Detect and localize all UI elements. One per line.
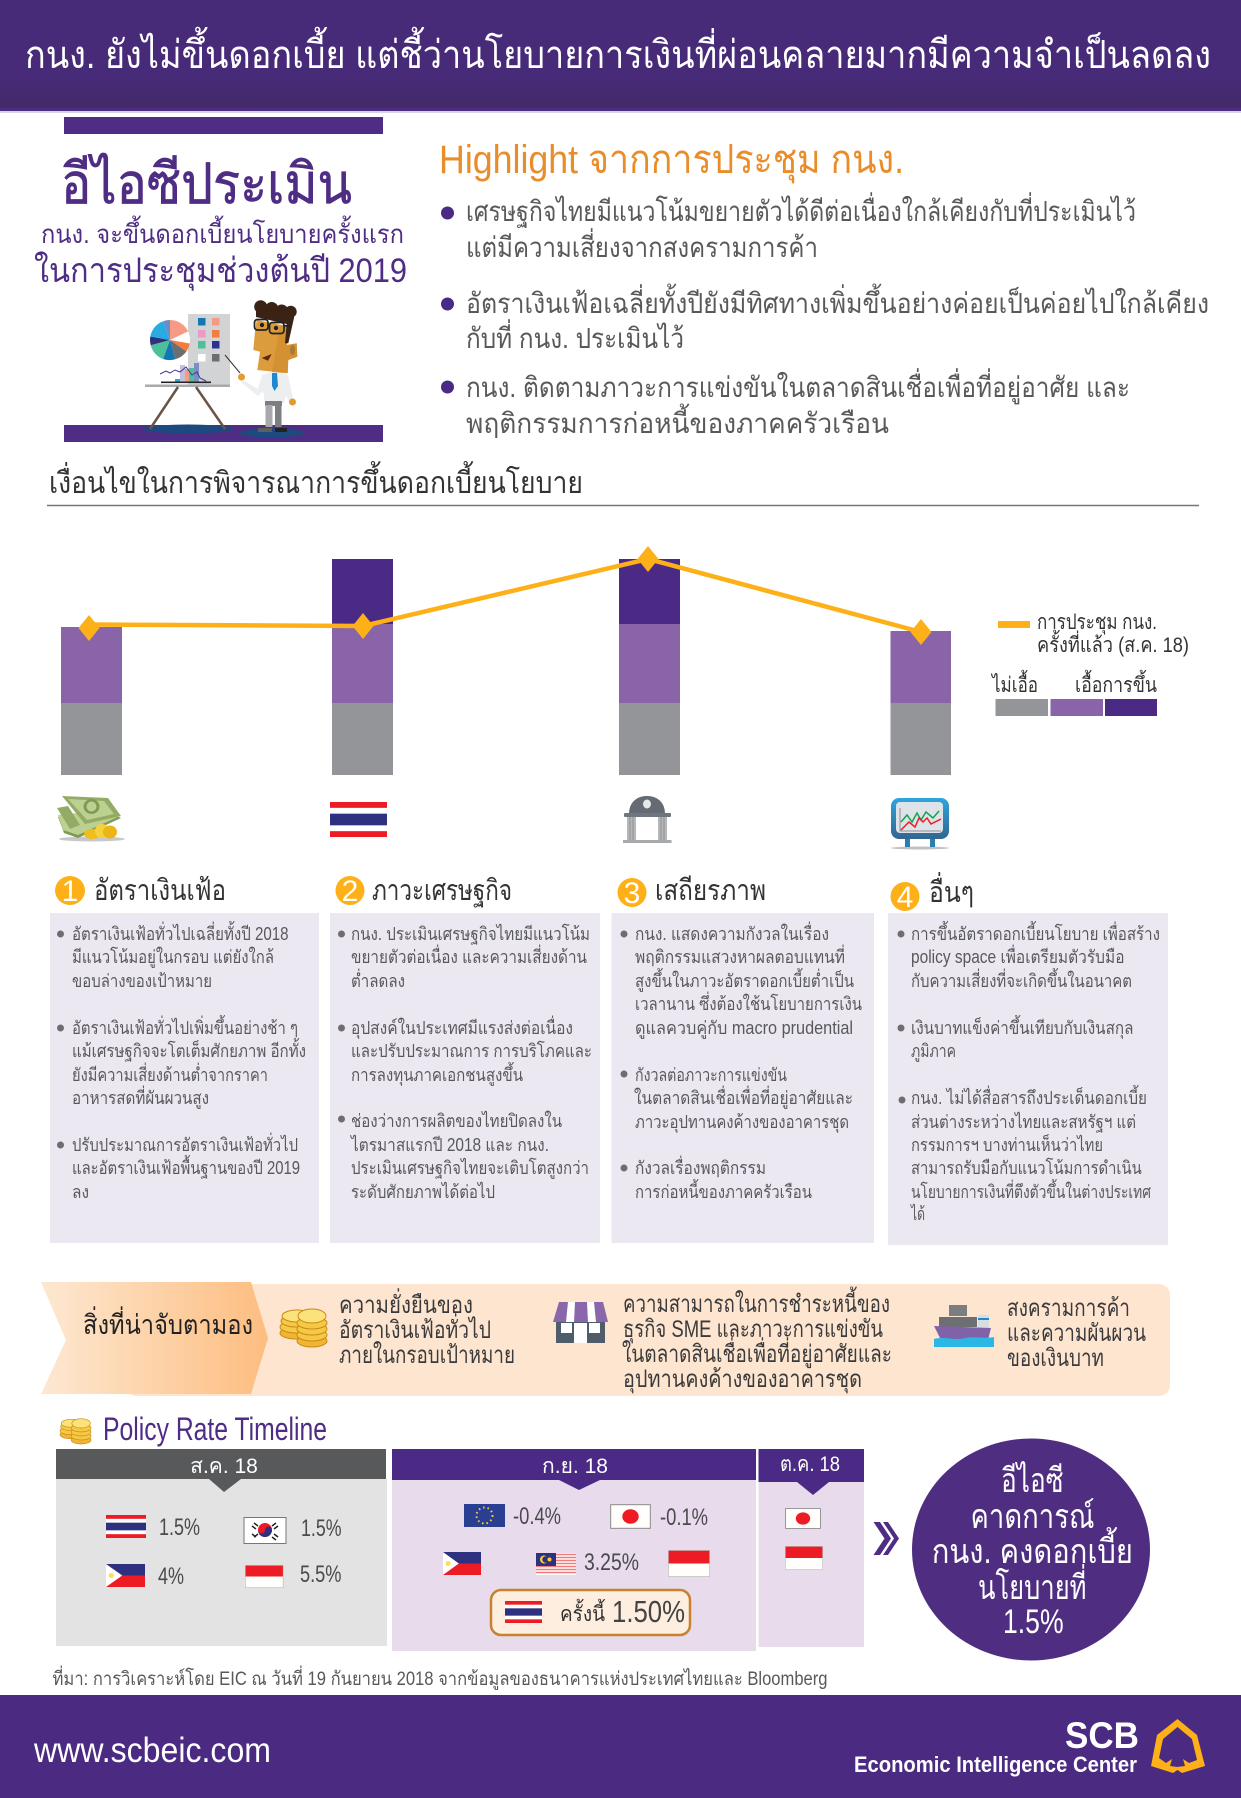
callout: this time 1.50% [491,1590,690,1635]
panel text: มีแนวโน้มอยู่ในกรอบ แต่ยังใกล้ [72,946,274,968]
flag: Korea 1.5%: 1.5% [301,1515,342,1542]
highlight bullet 3: กนง. ติดตามภาวะการแข่งขันในตลาดสินเชื่อเพื่อที่อยู่อาศัย และ [466,368,1130,405]
panel text: ภูมิภาค [911,1041,956,1062]
panel text: ได้ [910,1203,925,1224]
flag: Indonesia 5.5% [245,1561,342,1588]
heading: highlight: Highlight จากการประชุม กนง. [439,138,904,184]
legend: เอื้อการขึ้น [1075,670,1157,697]
callout circle: EIC forecast: 1.5% [1003,1603,1064,1641]
highlight bullet 2: กับที่ กนง. ประเมินไว้ [466,319,684,354]
panel text: การขึ้นอัตราดอกเบี้ยนโยบาย เพื่อสร้าง [911,921,1160,944]
section 2: economy [330,875,600,1243]
panel text: นโยบายการเงินที่ตึงตัวขึ้นในต่างประเทศ [911,1179,1151,1202]
panel: September 2018 [392,1449,756,1651]
panel text: ในตลาดสินเชื่อเพื่อที่อยู่อาศัยและ [634,1085,853,1109]
panel text: เวลานาน ซึ่งต้องใช้นโยบายการเงิน [635,991,862,1014]
watch item 3: สงครามการค้า [1007,1295,1130,1322]
section heading: conditions: เงื่อนไขในการพิจารณาการขึ้นดอกเบี้ยนโยบาย [49,461,583,500]
panel: things to watch [41,1282,1170,1396]
subheading line 2: ในการประชุมช่วงต้นปี 2019 [34,251,407,291]
panel text [330,913,600,1243]
number badge 4: 4 [897,881,913,914]
icon: small coins [60,1419,91,1444]
highlight bullet 3 [441,368,1130,439]
callout circle: EIC forecast: นโยบายที่ [978,1564,1086,1607]
flag: Thailand 1.5%: 1.5% [159,1514,200,1541]
legend [990,611,1189,716]
watch item 2 [622,1286,892,1394]
highlight bullet 3: พฤติกรรมการก่อหนี้ของภาคครัวเรือน [466,403,889,439]
flag: Malaysia 3.25% [536,1549,639,1576]
highlight bullet 1: แต่มีความเสี่ยงจากสงครามการค้า [466,228,818,263]
watch item 2: ในตลาดสินเชื่อเพื่อที่อยู่อาศัยและ [622,1337,892,1369]
flag: Korea 1.5% [244,1515,342,1544]
watch item 1 [339,1288,515,1369]
panel: August 2018: ส.ค. 18 [190,1455,258,1478]
heading: policy rate timeline: Policy Rate Timeline [103,1411,327,1447]
panel text [612,913,874,1243]
watch item 3: และความผันผวน [1007,1320,1146,1347]
panel: September 2018: ก.ย. 18 [542,1455,608,1478]
panel text: สามารถรับมือกับแนวโน้มการดำเนิน [911,1157,1142,1178]
flag: Philippines 4% [106,1563,184,1590]
panel text: กับความเสี่ยงที่จะเกิดขึ้นในอนาคต [911,968,1132,991]
panel: EIC assessment [34,117,407,442]
line: previous meeting [78,546,932,645]
watch item 1: ความยั่งยืนของ [339,1288,473,1319]
number badge 1: 1 [62,875,78,908]
panel text: ดูแลควบคู่กับ macro prudential [635,1018,853,1039]
icon: money [57,796,125,842]
watch item 3 [1007,1295,1146,1372]
bar 2 [332,559,393,775]
panel text: ภาวะอุปทานคงค้างของอาคารชุด [635,1112,849,1133]
number badge 2 [336,875,364,908]
panel text: กรรมการฯ บางท่านเห็นว่าไทย [911,1133,1103,1155]
legend: ไม่เอื้อ [990,670,1038,697]
flag: Thailand 1.5% [106,1514,200,1541]
panel text: กนง. ไม่ได้สื่อสารถึงประเด็นดอกเบี้ย [911,1085,1147,1108]
flag: Philippines 4%: 4% [158,1563,184,1590]
panel text: อุปสงค์ในประเทศมีแรงส่งต่อเนื่อง [351,1015,573,1039]
watch item 2: ความสามารถในการชำระหนี้ของ [623,1286,890,1318]
flag: Indonesia [668,1550,710,1577]
source note: ที่มา: การวิเคราะห์โดย EIC ณ วันที่ 19 กันยายน 2018 จากข้อมูลของธนาคารแห่งประเทศไทยและ Bloomberg [52,1665,828,1690]
flag: EU -0.4%: -0.4% [513,1503,561,1530]
panel text: ต่ำลดลง [351,968,405,991]
flag: EU -0.4% [464,1503,561,1530]
footer [0,1695,1241,1798]
panel text: เงินบาทแข็งค่าขึ้นเทียบกับเงินสกุล [911,1015,1134,1039]
panel text: การก่อหนี้ของภาคครัวเรือน [635,1179,812,1202]
callout circle: EIC forecast [912,1438,1150,1660]
panel text: ช่องว่างการผลิตของไทยปิดลงใน [351,1110,562,1131]
number badge 1 [55,875,85,908]
panel text: ยังมีความเสี่ยงด้านต่ำจากราคา [72,1062,268,1085]
section title: ภาวะเศรษฐกิจ [372,875,512,908]
panel text: ลง [72,1182,89,1202]
flag: Indonesia 5.5%: 5.5% [300,1561,342,1588]
panel text: การลงทุนภาคเอกชนสูงขึ้น [351,1062,523,1086]
section 4: others [888,872,1168,1245]
panel text: กังวลต่อภาวะการแข่งขัน [635,1065,787,1085]
highlight bullet 1 [441,192,1136,263]
panel text: ประเมินเศรษฐกิจไทยจะเติบโตสูงกว่า [351,1157,589,1179]
panel: October 2018 [758,1449,864,1647]
flag: Indonesia [785,1546,823,1570]
legend: ครั้งที่แล้ว (ส.ค. 18) [1037,630,1189,657]
panel text: กนง. แสดงความกังวลในเรื่อง [635,921,829,944]
panel: August 2018 [56,1449,387,1646]
watch item 1: ภายในกรอบเป้าหมาย [339,1341,515,1369]
watch item 3: ของเงินบาท [1007,1345,1104,1372]
panel text: และปรับประมาณการ การบริโภคและ [351,1040,592,1061]
arrow: chevrons [874,1522,899,1555]
panel text: กังวลเรื่องพฤติกรรม [635,1155,766,1178]
watch item 1: อัตราเงินเฟ้อทั่วไป [339,1313,491,1344]
icon: cargo ship [934,1305,994,1347]
panel text: กนง. ประเมินเศรษฐกิจไทยมีแนวโน้ม [351,923,590,945]
subheading line 1: กนง. จะขึ้นดอกเบี้ยนโยบายครั้งแรก [41,215,404,249]
callout: this time 1.50%: 1.50% [612,1594,685,1629]
heading: EIC assessment: อีไอซีประเมิน [61,152,352,215]
section title: เสถียรภาพ [655,875,766,907]
panel text: พฤติกรรมแสวงหาผลตอบแทนที่ [635,944,845,967]
watch item 2: อุปทานคงค้างของอาคารชุด [623,1366,862,1394]
section 3: stability [612,875,874,1243]
panel: October 2018: ต.ค. 18 [780,1453,840,1476]
panel text: และอัตราเงินเฟ้อพื้นฐานของปี 2019 [72,1155,300,1179]
icon: shop [553,1302,608,1343]
section title: อื่นๆ [929,872,974,909]
panel: highlights [439,138,1209,439]
callout circle: EIC forecast: อีไอซี [1001,1461,1064,1500]
organization name: Economic Intelligence Center [854,1752,1137,1777]
illustration: presenter with charts [143,300,304,438]
icon: temple pillars [623,796,672,843]
flag: Japan -0.1%: -0.1% [660,1504,708,1531]
callout circle: EIC forecast: คาดการณ์ [970,1498,1094,1536]
arrow label [41,1282,268,1394]
website: www.scbeic.com [33,1731,271,1770]
panel text: อัตราเงินเฟ้อทั่วไปเฉลี่ยทั้งปี 2018 [72,921,288,944]
icon: coins [280,1309,327,1347]
watch item 2: ธุรกิจ SME และภาวะการแข่งขัน [623,1316,883,1344]
arrow label: สิ่งที่น่าจับตามอง [83,1306,253,1340]
icon: SCB logo [1151,1719,1205,1773]
number badge 3 [618,877,646,910]
flag: Malaysia 3.25%: 3.25% [584,1549,639,1576]
panel text: ระดับศักยภาพได้ต่อไป [351,1181,495,1202]
panel text: แม้เศรษฐกิจจะโตเต็มศักยภาพ อีกทั้ง [72,1038,306,1062]
panel text: policy space เพื่อเตรียมตัวรับมือ [911,944,1124,967]
panel text [888,913,1168,1245]
header banner [0,0,1241,113]
bar 4 [890,631,951,775]
panel text: ขอบล่างของเป้าหมาย [72,971,212,991]
chart: stacked bars with line [61,546,951,775]
heading: policy rate timeline [60,1411,327,1447]
highlight bullet 2 [441,283,1209,354]
number badge 3: 3 [624,877,640,910]
callout circle: EIC forecast: กนง. คงดอกเบี้ย [932,1527,1133,1571]
callout: this time 1.50%: ครั้งนี้ [560,1599,605,1626]
bar 1 [61,627,122,775]
icon: Thai flag [330,802,387,837]
legend: การประชุม กนง. [1037,611,1157,635]
panel text: ปรับประมาณการอัตราเงินเฟ้อทั่วไป [72,1132,298,1155]
panel text: สูงขึ้นในภาวะอัตราดอกเบี้ยต่ำเป็น [635,968,854,992]
panel text: ส่วนต่างระหว่างไทยและสหรัฐฯ แต่ [911,1111,1136,1133]
panel text: ขยายตัวต่อเนื่อง และความเสี่ยงด้าน [351,944,587,967]
panel text [50,913,319,1243]
flag: Japan [786,1509,820,1528]
icon: monitor chart [891,798,949,850]
panel text: ไตรมาสแรกปี 2018 และ กนง. [349,1134,549,1155]
number badge 2: 2 [342,875,358,908]
number badge 4 [890,881,920,914]
flag: Japan -0.1% [611,1504,708,1531]
section 1: inflation [50,875,319,1243]
bar 3 [619,559,680,775]
panel text: อัตราเงินเฟ้อทั่วไปเพิ่มขึ้นอย่างช้า ๆ [72,1015,298,1038]
flag: Philippines [443,1552,481,1575]
panel text: อาหารสดที่ผันผวนสูง [72,1085,209,1109]
SCB wordmark: SCB [1065,1715,1139,1756]
section title: อัตราเงินเฟ้อ [94,875,226,907]
